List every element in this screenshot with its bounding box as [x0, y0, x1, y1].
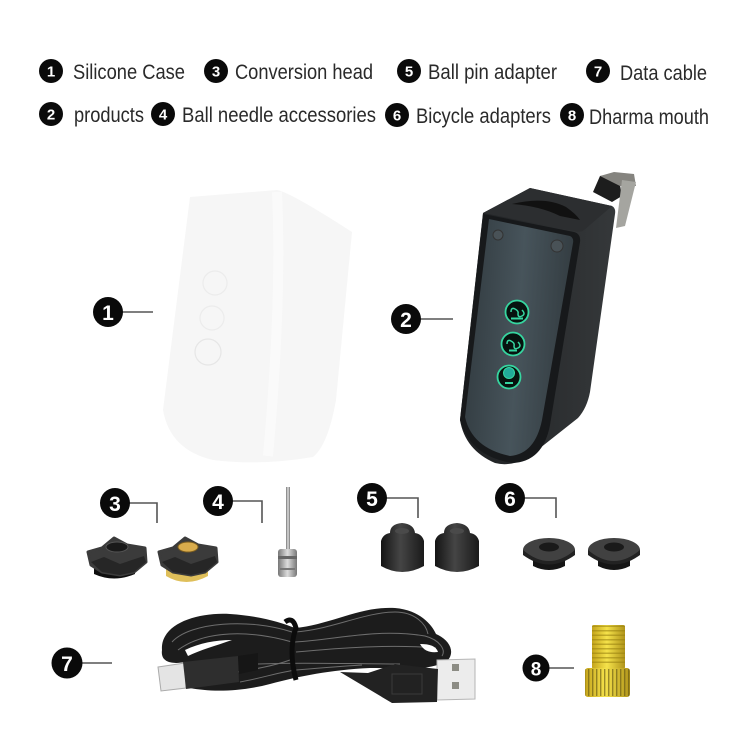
callout 7: 7: [61, 653, 73, 676]
callout 5: 5: [366, 488, 378, 511]
legend item 3: Conversion head: Conversion head: [235, 61, 373, 84]
callout 8: [522, 654, 574, 682]
ball pin adapter 1: [381, 523, 424, 572]
callout 8: 8: [531, 660, 541, 680]
legend item 6: Bicycle adapters: Bicycle adapters: [416, 105, 551, 128]
callout 4: [203, 486, 262, 523]
legend item 8: Dharma mouth: 8: [568, 108, 576, 124]
ball needle: [278, 487, 297, 577]
cable mass: [162, 608, 451, 691]
pump head: [593, 172, 636, 228]
callout 5: [357, 483, 418, 518]
callout 1: [93, 297, 153, 327]
callout 2: [391, 304, 453, 334]
USB-C connector: [158, 653, 258, 691]
bicycle adapter 1: [523, 538, 575, 570]
legend item 4: Ball needle accessories: 4: [159, 106, 168, 124]
callout 3: 3: [109, 493, 121, 516]
button 1: [506, 300, 528, 324]
legend item 5: Ball pin adapter: [397, 59, 557, 84]
legend item 8: Dharma mouth: [560, 103, 709, 129]
legend item 2: products: 2: [47, 106, 55, 124]
legend item 3: Conversion head: 3: [212, 64, 220, 80]
legend item 5: Ball pin adapter: 5: [405, 64, 413, 80]
conversion head: brass knob: [159, 538, 217, 582]
legend item 8: Dharma mouth: Dharma mouth: [589, 106, 709, 129]
brass adapter: [585, 625, 630, 697]
button 3: [498, 366, 520, 388]
data cable: [158, 608, 475, 703]
cable strands: [172, 612, 443, 682]
front panel: [460, 214, 580, 463]
USB-A connector: [340, 659, 475, 703]
callout 3: [100, 488, 157, 523]
legend: [39, 59, 709, 129]
legend item 2: products: [39, 102, 144, 127]
legend item 7: Data cable: [586, 59, 707, 85]
legend item 1: Silicone Case: [39, 59, 185, 84]
legend item 3: Conversion head: [204, 59, 373, 84]
callout 4: 4: [212, 491, 224, 514]
inner gaps: [185, 640, 438, 656]
legend item 7: Data cable: Data cable: [620, 62, 707, 85]
pump device: [460, 172, 636, 464]
button 2: [502, 332, 524, 356]
pump body: [460, 188, 615, 464]
callout 2: 2: [400, 309, 412, 332]
legend item 6: Bicycle adapters: [385, 103, 551, 128]
bicycle adapter 2: [588, 538, 640, 570]
legend item 5: Ball pin adapter: Ball pin adapter: [428, 61, 557, 84]
cable tie: [285, 620, 296, 680]
legend item 4: Ball needle accessories: Ball needle accessories: [182, 104, 376, 127]
legend item 1: Silicone Case: Silicone Case: [73, 61, 185, 84]
legend item 1: Silicone Case: 1: [47, 64, 55, 80]
callout 6: [495, 483, 556, 518]
callout 7: [52, 648, 112, 678]
legend item 2: products: products: [74, 104, 144, 127]
ball pin adapter 2: [435, 523, 479, 572]
silicone case: [163, 190, 352, 462]
legend item 6: Bicycle adapters: 6: [393, 108, 401, 124]
legend item 7: Data cable: 7: [594, 64, 602, 80]
callout 1: 1: [102, 302, 114, 325]
callout 6: 6: [504, 488, 516, 511]
conversion head: black knob: [88, 538, 146, 578]
